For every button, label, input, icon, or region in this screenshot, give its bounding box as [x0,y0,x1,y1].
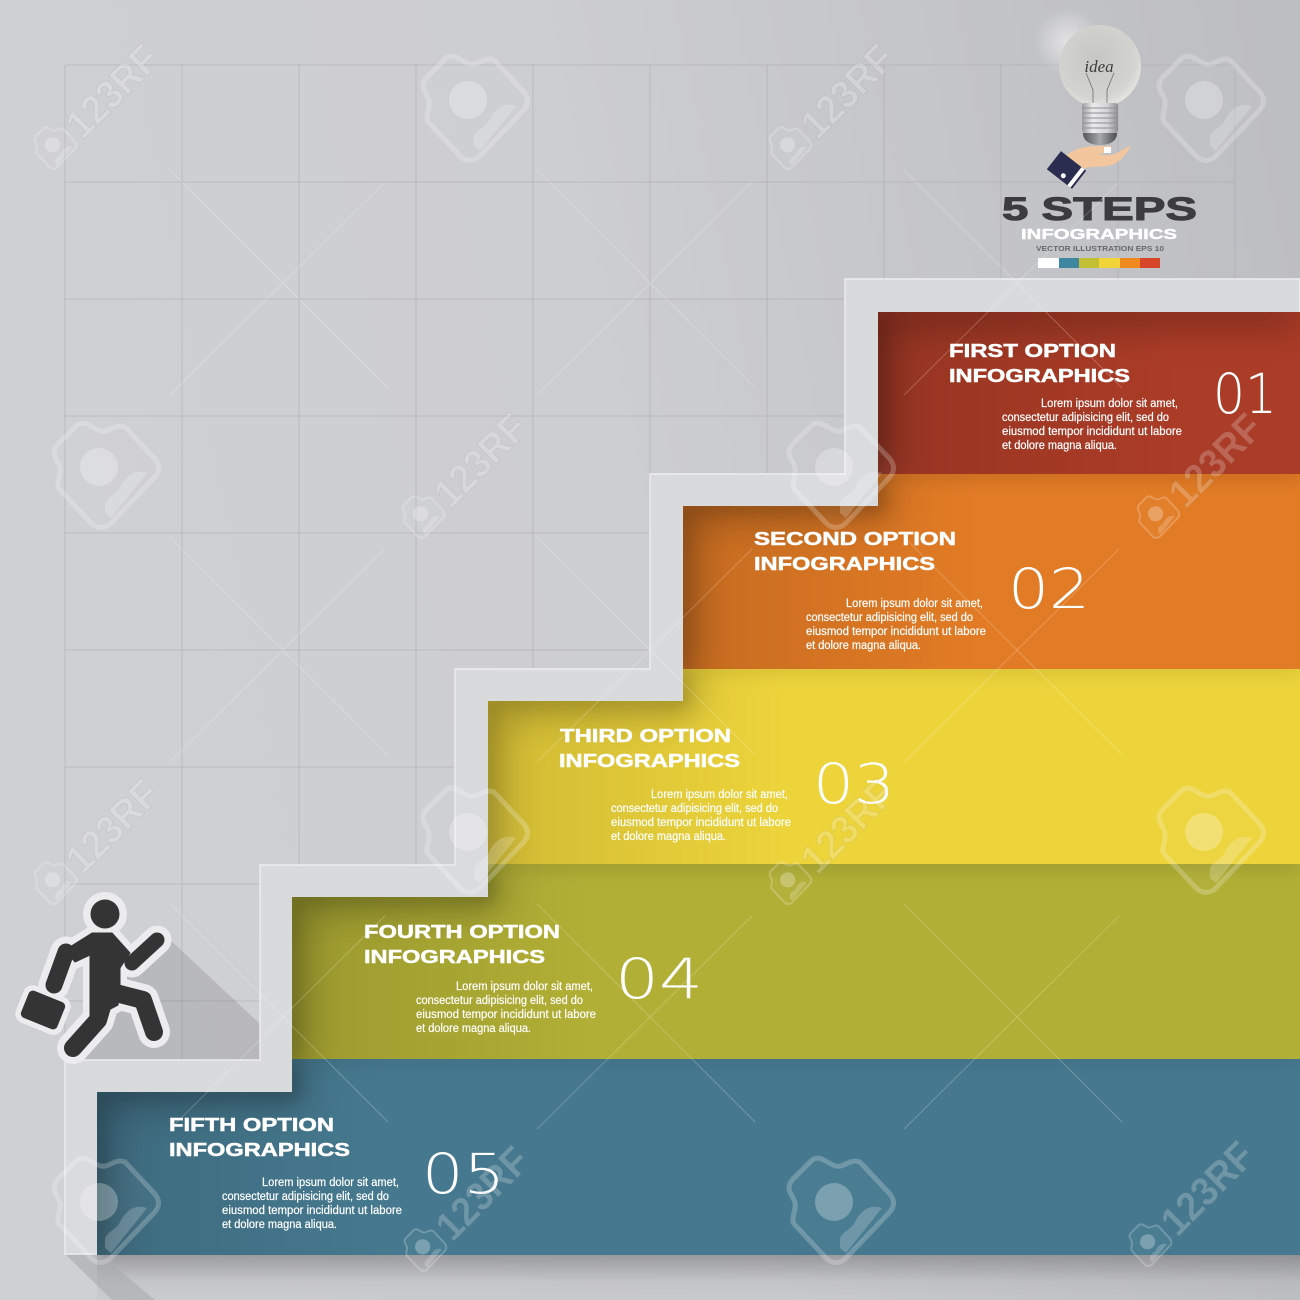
title: 5 steps: INFOGRAPHICS [1021,226,1177,243]
title: 5 steps: 5 STEPS [1002,191,1197,227]
watermark: 123RF logos: 123RF [58,772,168,882]
step 2 text block: et dolore magna aliqua. [806,640,921,652]
step 2 text block: SECOND OPTION [754,529,956,549]
step 3 text block: et dolore magna aliqua. [611,831,726,843]
watermark: 123RF logos: 123RF [428,1139,538,1249]
step 4 text block: consectetur adipisicing elit, sed do [416,995,583,1007]
step 3 text block: INFOGRAPHICS [559,751,740,771]
watermark: 123RF logos: 123RF [426,406,536,516]
step 2 text block: INFOGRAPHICS [754,554,935,574]
title: 5 steps [1002,191,1197,253]
step 2 text block: 02 [1008,557,1090,621]
step 5 text block: consectetur adipisicing elit, sed do [222,1191,389,1203]
title: 5 steps: VECTOR ILLUSTRATION EPS 10 [1036,246,1164,253]
panel: step 2 orange band [683,474,1300,680]
step 2 text block [754,529,1090,652]
step 2 text block: Lorem ipsum dolor sit amet, [846,598,983,610]
step 5 text block: INFOGRAPHICS [169,1140,350,1160]
step 1 text block: Lorem ipsum dolor sit amet, [1041,398,1178,410]
step 3 text block: 03 [813,752,895,816]
step 5 text block: et dolore magna aliqua. [222,1219,337,1231]
watermark: crossed diagonal lines [170,170,1122,1129]
icon: idea light bulb [1034,8,1141,145]
panel: step 1 red band [878,312,1300,480]
step 1 text block: et dolore magna aliqua. [1002,440,1117,452]
step 5 text block [169,1115,505,1231]
step 1 text block [949,341,1277,452]
watermark: 123RF logos: 123RF [1161,406,1271,516]
staircase frame [65,279,1300,1254]
ground shadow below the stairs [65,1254,1300,1300]
step 1 text block: eiusmod tempor incididunt ut labore [1002,426,1182,438]
watermark: 123RF logos: 123RF [793,37,903,147]
step 3 text block [559,726,895,843]
step 3 text block: THIRD OPTION [560,726,731,746]
icon: hand holding the bulb [1047,146,1131,189]
step 4 text block: INFOGRAPHICS [364,947,545,967]
panel: step 4 green band [292,864,1300,1070]
step 3 text block: consectetur adipisicing elit, sed do [611,803,778,815]
step 4 text block: et dolore magna aliqua. [416,1023,531,1035]
panel: step 5 blue band [97,1059,1300,1265]
icon: idea light bulb: idea [1084,57,1114,76]
long shadow behind the runner [80,935,260,1060]
step 1 text block: INFOGRAPHICS [949,366,1130,386]
step 5 text block: FIFTH OPTION [169,1115,334,1135]
step 2 text block: eiusmod tempor incididunt ut labore [806,626,986,638]
step 4 text block: Lorem ipsum dolor sit amet, [456,981,593,993]
watermark: 123RF logos: 123RF [793,772,903,882]
step 1 text block: 01 [1213,362,1277,426]
step 1 text block: consectetur adipisicing elit, sed do [1002,412,1169,424]
step 4 text block [364,922,703,1035]
background grid [65,65,1235,1060]
icon: running businessman [21,899,157,1048]
step 4 text block: 04 [615,947,703,1011]
step 3 text block: Lorem ipsum dolor sit amet, [651,789,788,801]
colour legend strip [1038,258,1160,268]
watermark: 123RF logos: 123RF [1153,1134,1263,1244]
step 3 text block: eiusmod tempor incididunt ut labore [611,817,791,829]
step 2 text block: consectetur adipisicing elit, sed do [806,612,973,624]
step 4 text block: FOURTH OPTION [364,922,560,942]
step 5 text block: Lorem ipsum dolor sit amet, [262,1177,399,1189]
watermark: 123RF logos: 123RF [58,37,168,147]
step 4 text block: eiusmod tempor incididunt ut labore [416,1009,596,1021]
step 1 text block: FIRST OPTION [949,341,1116,361]
step 5 text block: 05 [422,1142,505,1206]
panel: step 3 yellow band [488,669,1300,875]
step 5 text block: eiusmod tempor incididunt ut labore [222,1205,402,1217]
